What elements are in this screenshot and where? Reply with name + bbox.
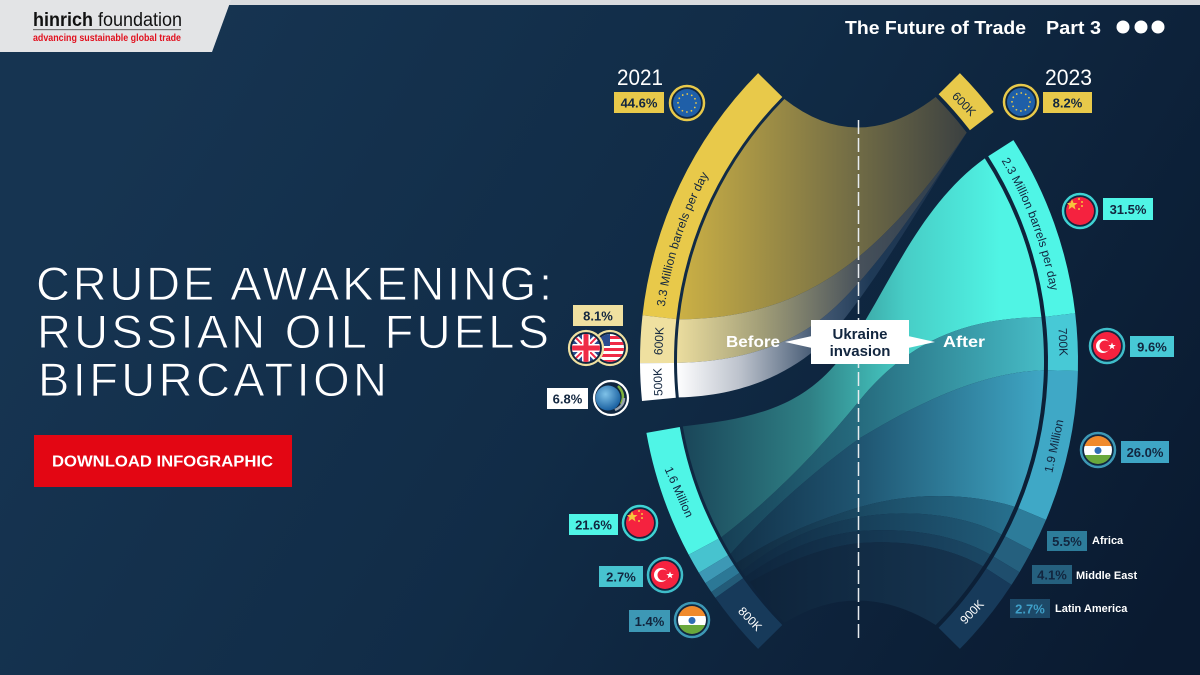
arc labels [628,84,1080,638]
2023 Middle East share: 4.1% [1037,568,1067,582]
segment: India [699,555,734,583]
2021 OECD share [547,381,628,415]
arc labels: 3.3 Million barrels per day [656,172,709,306]
2021 EU share: 44.6% [621,96,658,110]
2021 UK and US share [569,305,627,365]
2023 China share: 31.5% [1110,202,1147,217]
ribbon: EU [679,97,967,319]
2021 India share [629,603,709,637]
arc labels: 1.6 Million [662,464,696,520]
2023 EU share: 8.2% [1053,96,1083,110]
segment: 700K [1045,313,1078,371]
2023 Middle East share [1032,565,1137,584]
segment: Middle East [711,573,743,598]
2023 Turkey share: 9.6% [1137,340,1167,354]
year: 2021: 2021 [617,65,663,90]
label: After: After [943,334,985,351]
2023 EU share [1004,85,1092,119]
callout: Ukraine invasion [785,320,935,364]
2023 Latin America share: Latin America [1055,603,1128,615]
segment: Middle East [994,536,1032,572]
ribbon: Africa [736,496,1015,571]
download button: DOWNLOAD INFOGRAPHIC [52,454,273,470]
arc labels: 800K [735,604,765,634]
left arc: 2021 segments [640,73,782,649]
ribbon: UK and US [677,133,967,363]
ribbon: Middle East [742,513,1002,577]
year: 2023: 2023 [1045,65,1092,90]
download button [34,435,292,487]
label: Before: Before [726,334,780,351]
2023 India share: 26.0% [1127,445,1164,460]
2023 India share [1081,433,1169,467]
callout: Ukraine invasion: Ukraine [832,326,888,343]
segment: Africa [705,565,739,592]
segment: Turkey [689,539,728,573]
2023 Middle East share: Middle East [1076,570,1137,582]
2023 Latin America share [1010,599,1128,618]
ribbon: India [731,370,1044,563]
arc labels: 600K [949,89,979,119]
arc labels: 700K [1056,328,1070,356]
ribbon: others [750,542,983,625]
2023 Turkey share [1090,329,1174,363]
2021 Turkey share [599,558,682,592]
2021 China share: 21.6% [575,518,612,532]
2021 EU share [614,86,704,120]
segment: 2.3 Million [988,140,1075,317]
segment: 3.3 Million [642,73,782,319]
2023 Africa share [1047,531,1124,551]
2023 China share [1063,194,1153,228]
callout: Ukraine invasion: invasion [830,343,890,360]
ribbon: China [683,158,1041,537]
logo: hinrich foundation: advancing sustainable global trade [33,33,181,44]
icon: US flag [593,331,627,365]
logo: hinrich foundation: hinrich foundation [33,10,182,31]
segment: 800K [715,578,782,649]
series label: The Future of Trade Part 3: The Future of Trade [845,18,1026,38]
2023 Africa share: Africa [1092,535,1124,547]
segment: 600K [640,315,676,363]
icon: UK flag [569,331,603,365]
series label: The Future of Trade Part 3 [845,18,1164,38]
header strip [0,0,1200,5]
segment: 900K [939,568,1012,649]
title: CRUDE AWAKENING: [36,257,552,310]
2021 Turkey share: 2.7% [606,570,636,584]
segment: Latin America [986,557,1020,585]
2021 India share: 1.4% [635,614,665,629]
title [36,257,552,406]
right arc: 2023 segments [939,73,1078,649]
arc labels: 2.3 Million barrels per day [1002,158,1057,290]
segment: 1.6 Million [646,427,719,555]
segment: 1.9 Million [1018,370,1078,520]
arc labels: 900K [957,597,987,627]
centre dashed line [858,120,860,638]
2021 UK and US share: 8.1% [583,308,613,324]
ribbon: Turkey [721,317,1044,554]
segment: Africa [1005,508,1046,550]
arc labels: 1.9 Million [1042,418,1066,474]
segment: 600K EU [939,73,994,130]
chord ribbons [677,97,1044,625]
2023 Latin America share: 2.7% [1015,602,1045,616]
2021 OECD share: 6.8% [553,392,583,406]
2023 Africa share: 5.5% [1052,534,1082,549]
segment: 500K [640,363,676,401]
ribbon: other OECD [677,133,967,397]
title: BIFURCATION [38,353,387,406]
2021 China share [569,506,657,540]
title: RUSSIAN OIL FUELS [37,305,549,358]
ribbon: Latin America [746,530,990,582]
logo: hinrich foundation [0,0,231,52]
arc labels: 500K [651,368,665,396]
series label: The Future of Trade Part 3: Part 3 [1046,18,1101,38]
arc labels: 600K [651,327,667,355]
